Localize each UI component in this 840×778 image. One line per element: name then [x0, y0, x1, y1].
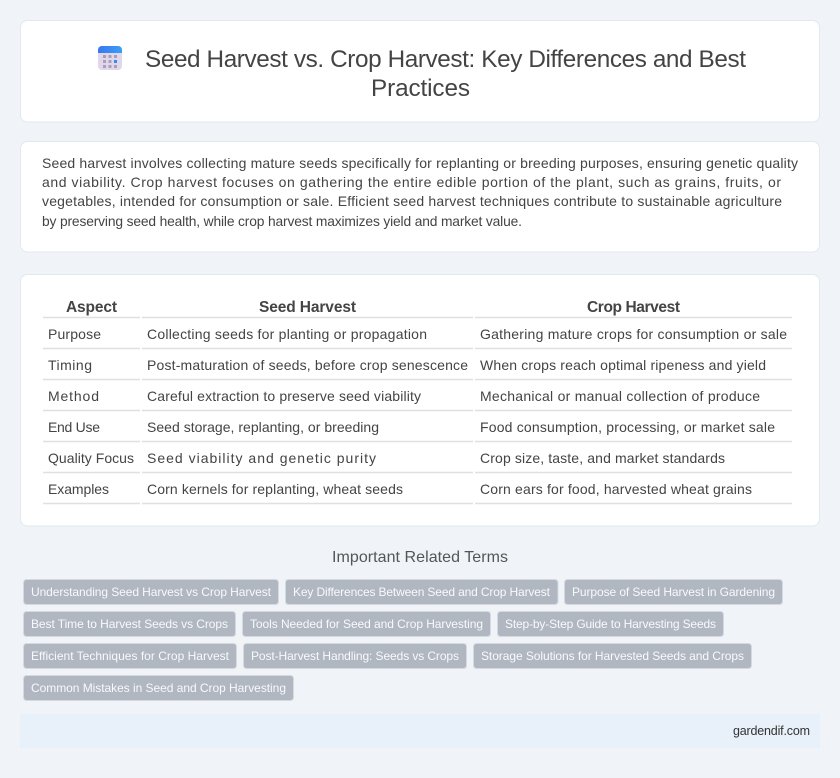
related term chips: Key Differences Between Seed and Crop Harvest [293, 585, 551, 599]
title [145, 46, 746, 102]
panel: title card [20, 20, 820, 122]
panel: comparison table [20, 274, 820, 526]
panel: introduction text [20, 142, 820, 252]
table header: Crop Harvest [587, 299, 680, 316]
table row: timing: When crops reach optimal ripeness and yield [480, 357, 766, 373]
table row: quality focus: Quality Focus [48, 450, 134, 466]
table row: timing: Timing [48, 357, 92, 373]
footer: gardendif.com [733, 724, 810, 738]
table header [66, 299, 680, 316]
table row: end use [48, 419, 775, 435]
table header: Seed Harvest [259, 299, 356, 316]
title: Practices [371, 75, 470, 102]
table row: method: Mechanical or manual collection of produce [480, 388, 760, 404]
related term chips: Post-Harvest Handling: Seeds vs Crops [251, 649, 459, 663]
table row: method [48, 388, 760, 404]
related term chips: Best Time to Harvest Seeds vs Crops [31, 617, 228, 631]
table row: examples [48, 481, 752, 497]
footer [20, 714, 820, 748]
table header: Aspect [66, 299, 117, 316]
table row: purpose: Purpose [48, 326, 101, 342]
table row: end use: Seed storage, replanting, or breeding [147, 419, 379, 435]
table row: purpose: Gathering mature crops for consumption or sale [480, 326, 787, 342]
related term chips: Purpose of Seed Harvest in Gardening [572, 585, 775, 599]
related term chips: Common Mistakes in Seed and Crop Harvesting [31, 681, 286, 695]
table row: method: Method [48, 388, 99, 404]
panel: introduction text: Seed harvest involves collecting mature seeds specifically for replanting or breeding purposes, ensuring genetic quality [42, 155, 798, 171]
table row: examples: Corn kernels for replanting, wheat seeds [147, 481, 403, 497]
table row: end use: End Use [48, 419, 100, 435]
related term chips: Understanding Seed Harvest vs Crop Harvest [31, 585, 272, 599]
table row: examples: Examples [48, 481, 109, 497]
related term chips: Tools Needed for Seed and Crop Harvesting [250, 617, 483, 631]
title: Seed Harvest vs. Crop Harvest: Key Differences and Best [145, 46, 746, 73]
panel: introduction text: by preserving seed health, while crop harvest maximizes yield and market value. [42, 214, 522, 229]
table row: quality focus: Crop size, taste, and market standards [480, 450, 725, 466]
related term chips: Storage Solutions for Harvested Seeds and Crops [481, 649, 744, 663]
icon: calendar [98, 46, 122, 70]
table row: timing [48, 357, 766, 373]
table row: end use: Food consumption, processing, or market sale [480, 419, 775, 435]
table row: purpose [48, 326, 787, 342]
panel: introduction text: vegetables, intended for consumption or sale. Efficient seed harvest techniques contribute to sustainable agriculture [42, 193, 782, 209]
table row: timing: Post-maturation of seeds, before crop senescence [147, 357, 468, 373]
table row: purpose: Collecting seeds for planting or propagation [147, 326, 427, 342]
related term chips: Efficient Techniques for Crop Harvest [31, 649, 230, 663]
table row: examples: Corn ears for food, harvested wheat grains [480, 481, 752, 497]
related term chips [24, 580, 782, 700]
heading: related terms: Important Related Terms [332, 549, 508, 566]
related term chips: Step-by-Step Guide to Harvesting Seeds [505, 617, 716, 631]
panel: introduction text: and viability. Crop harvest focuses on gathering the entire edible portion of the plant, such as grains, fruits, or [42, 174, 781, 190]
table row: quality focus: Seed viability and genetic purity [147, 450, 376, 466]
table row: quality focus [48, 450, 725, 466]
table row: method: Careful extraction to preserve seed viability [147, 388, 421, 404]
